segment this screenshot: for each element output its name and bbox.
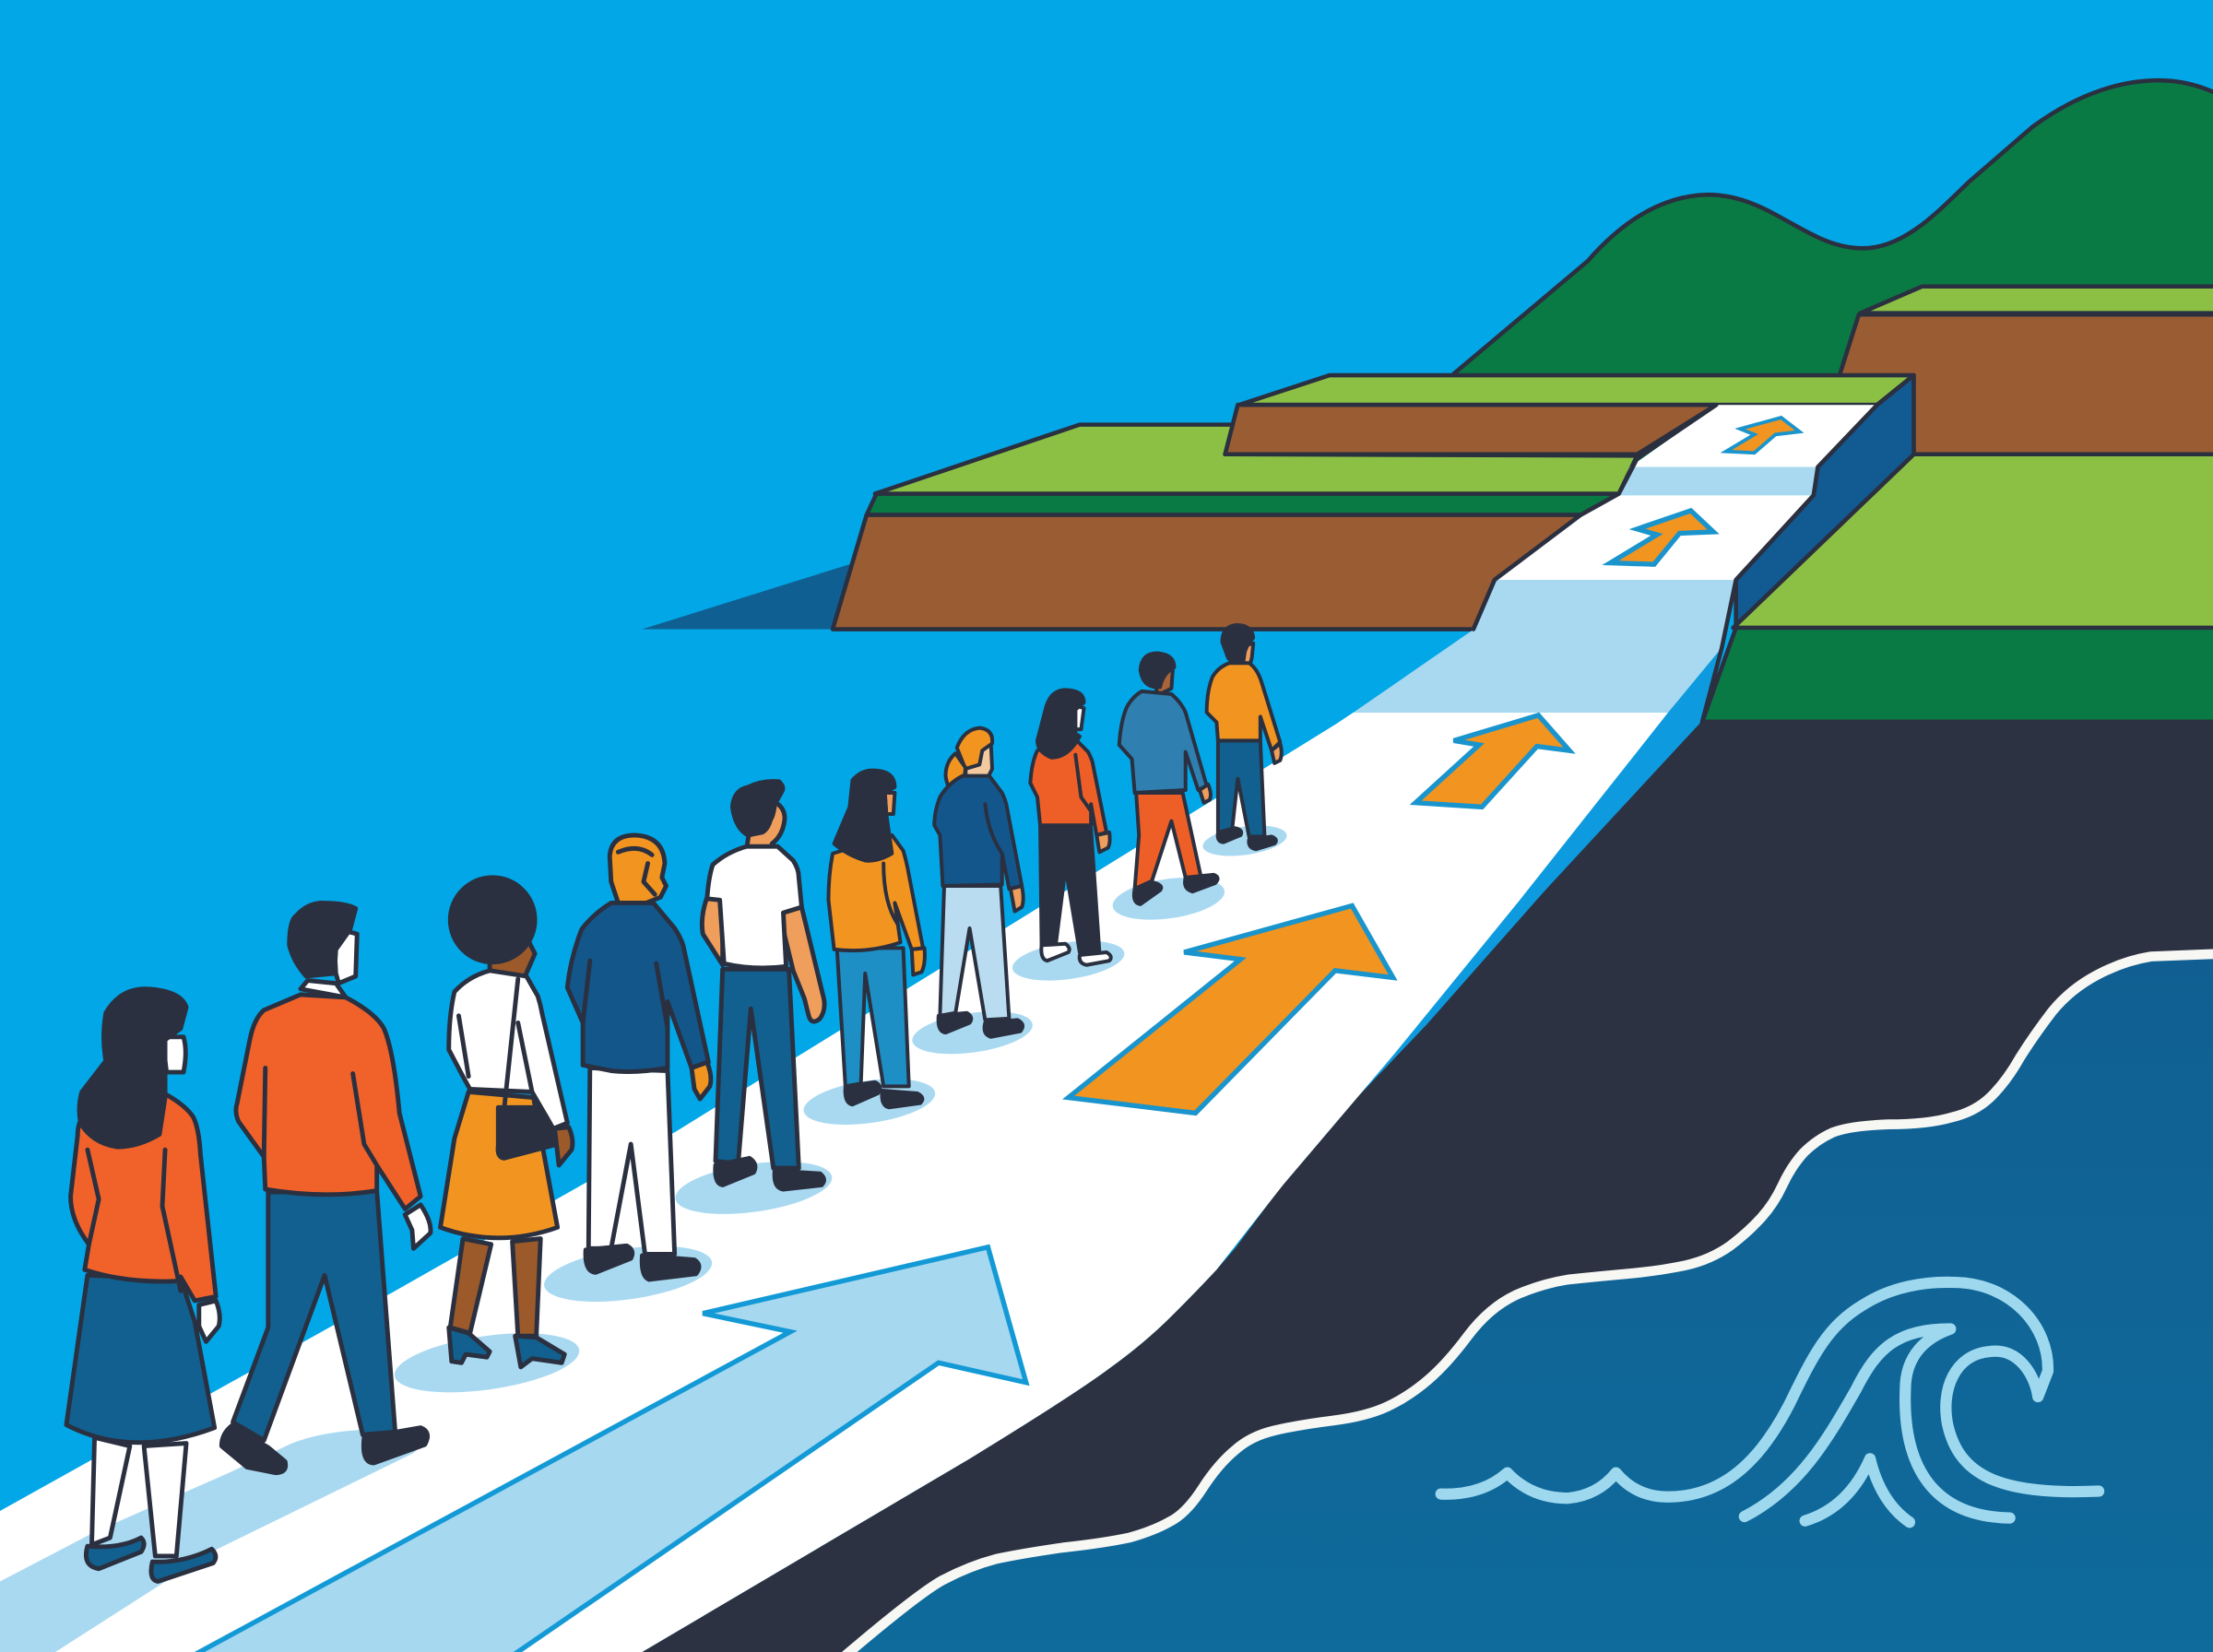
terrace soil face: [1835, 314, 2213, 454]
top: [71, 1095, 216, 1301]
bag strap: [503, 979, 518, 1112]
collar: [301, 981, 346, 997]
main wave curl: [1441, 1282, 2099, 1498]
face: [335, 931, 357, 984]
left shoe: [586, 1245, 633, 1272]
right leg: [513, 1239, 540, 1336]
jacket arm line: [985, 804, 1002, 854]
inner wave crest: [1745, 1329, 2010, 1518]
left shoe: [716, 1158, 755, 1185]
jacket: [1119, 691, 1207, 793]
large pale blue arrow: [189, 1247, 1026, 1652]
left shoe: [1134, 881, 1161, 904]
white lower road: [0, 713, 1668, 1652]
skirt: [441, 1092, 558, 1238]
pale blue step: [1617, 467, 1817, 495]
dark blue wedge shadow: [642, 564, 849, 630]
hair: [732, 782, 783, 835]
face: [885, 793, 894, 814]
right shoe: [1080, 952, 1111, 965]
person 8: long hair, orange top, black pants: [1010, 690, 1127, 986]
hand: [692, 1062, 711, 1099]
person 9: blue jacket, orange pants: [1110, 654, 1227, 926]
left leg: [91, 1437, 130, 1545]
top grass: [1239, 375, 1914, 405]
blouse: [449, 971, 567, 1128]
left grass shelf: [875, 425, 1638, 494]
person 7: ponytail, navy jacket, pale jeans: [909, 728, 1035, 1061]
right shoe: [151, 1549, 216, 1581]
right heel: [515, 1336, 564, 1367]
top soil face: [1225, 405, 1716, 454]
lower grass slope: [1734, 454, 2213, 628]
left heel: [449, 1328, 490, 1363]
left shoe: [1041, 944, 1070, 961]
neck: [490, 934, 535, 976]
right shoe: [985, 1020, 1023, 1037]
lower dark green band: [1702, 628, 2213, 723]
head: [609, 835, 666, 903]
climbing road: [0, 405, 1877, 1652]
blouse arm lines: [458, 1016, 532, 1092]
person 10: orange shirt, farthest: [1201, 625, 1289, 861]
pants: [1135, 793, 1201, 889]
hair: [79, 989, 186, 1147]
pants: [1218, 740, 1264, 836]
pale blue road section: [1354, 580, 1736, 713]
top: [828, 835, 923, 950]
person 2: orange sweater, navy pants, walking: [0, 903, 431, 1652]
left shoe: [221, 1425, 286, 1473]
left shoe: [86, 1538, 144, 1569]
right upper terrace: [1835, 287, 2213, 454]
person 1: long hair, orange top, navy skirt: [66, 989, 219, 1581]
ground shadow: [1110, 871, 1227, 926]
top arm lines: [88, 1150, 181, 1291]
road edge outlines: [1473, 405, 1877, 723]
ground shadow: [540, 1237, 716, 1311]
ground shadow: [1010, 935, 1127, 986]
face: [162, 1037, 185, 1072]
tiny orange arrow: [1726, 418, 1800, 453]
hand: [1272, 743, 1282, 763]
left shoe: [939, 1013, 971, 1032]
afro hair: [450, 878, 535, 962]
left cliff block: [833, 494, 1619, 630]
jacket: [567, 903, 708, 1072]
left shoe: [1218, 828, 1241, 843]
hair: [957, 728, 992, 769]
right arm: [779, 907, 824, 1021]
left arm: [702, 897, 723, 965]
pants: [940, 886, 1009, 1020]
ponytail: [946, 753, 965, 796]
big orange arrow: [1069, 905, 1393, 1113]
handbag: [498, 1107, 558, 1158]
left shoe: [846, 1082, 880, 1104]
wave icon: [1441, 1282, 2099, 1522]
right shoe: [1249, 836, 1276, 849]
jacket arm lines: [583, 961, 668, 1029]
hair: [1037, 690, 1084, 758]
right shoe: [882, 1091, 922, 1107]
white top road: [1630, 405, 1877, 467]
dark cliff: [642, 719, 2213, 1652]
small orange arrow: [1610, 511, 1713, 564]
right shoe: [775, 1171, 824, 1189]
hair: [1141, 654, 1174, 687]
upper green terrace: [875, 375, 1914, 494]
sea with white shoreline: [841, 953, 2213, 1652]
neck and face: [965, 740, 992, 780]
hair: [1223, 625, 1253, 662]
back hills: [1454, 80, 2213, 466]
hand: [912, 948, 925, 974]
path side wall: [1736, 375, 1914, 625]
hair: [834, 771, 894, 861]
face: [1154, 668, 1173, 695]
tee: [707, 846, 801, 968]
ground shadow: [391, 1323, 583, 1402]
hand: [199, 1301, 219, 1341]
pants: [716, 969, 799, 1168]
person 4: blond hair, navy jacket, white pants: [540, 835, 716, 1311]
hair: [290, 903, 356, 976]
right lower terrace: [1702, 454, 2213, 723]
pants: [837, 948, 909, 1086]
small splash: [1805, 1458, 1910, 1522]
hand: [1011, 886, 1024, 912]
ground shadow: [800, 1071, 938, 1132]
person 3: afro, white blouse, amber skirt, bag: [391, 878, 583, 1402]
white middle road: [1495, 495, 1814, 580]
top arm line: [1075, 755, 1091, 811]
right shoe: [1185, 875, 1218, 891]
left leg: [450, 1239, 491, 1333]
jacket: [934, 776, 1022, 889]
sweater arm lines: [264, 1068, 377, 1165]
terrace grass top: [1860, 287, 2213, 313]
hand: [1096, 832, 1110, 852]
skirt: [66, 1275, 215, 1443]
pants: [233, 1191, 396, 1440]
shirt: [1207, 663, 1280, 750]
ear detail: [618, 848, 655, 894]
green band: [867, 494, 1619, 515]
ground shadow: [1201, 821, 1289, 861]
neck and face: [1235, 643, 1253, 668]
face and neck: [747, 801, 785, 849]
top: [1030, 740, 1106, 835]
face: [1075, 705, 1084, 729]
sweater: [236, 995, 420, 1209]
pants: [1040, 825, 1099, 952]
hand: [405, 1205, 431, 1248]
person 6: long hair, amber top, teal jeans: [800, 771, 938, 1132]
ground shadow: [0, 1429, 423, 1652]
ground shadow: [672, 1153, 835, 1222]
blue road edge stripe: [1213, 647, 1722, 1266]
top arm line: [883, 864, 897, 924]
right shoe: [363, 1428, 428, 1463]
medium orange arrow: [1415, 715, 1569, 807]
right leg: [144, 1444, 186, 1556]
ground shadow: [909, 1005, 1035, 1061]
person 5: white tee, navy pants: [672, 782, 835, 1222]
hand: [1200, 785, 1211, 803]
right shoe: [642, 1256, 699, 1280]
soil face: [833, 515, 1580, 630]
hand: [555, 1127, 573, 1165]
pants: [588, 1068, 675, 1254]
